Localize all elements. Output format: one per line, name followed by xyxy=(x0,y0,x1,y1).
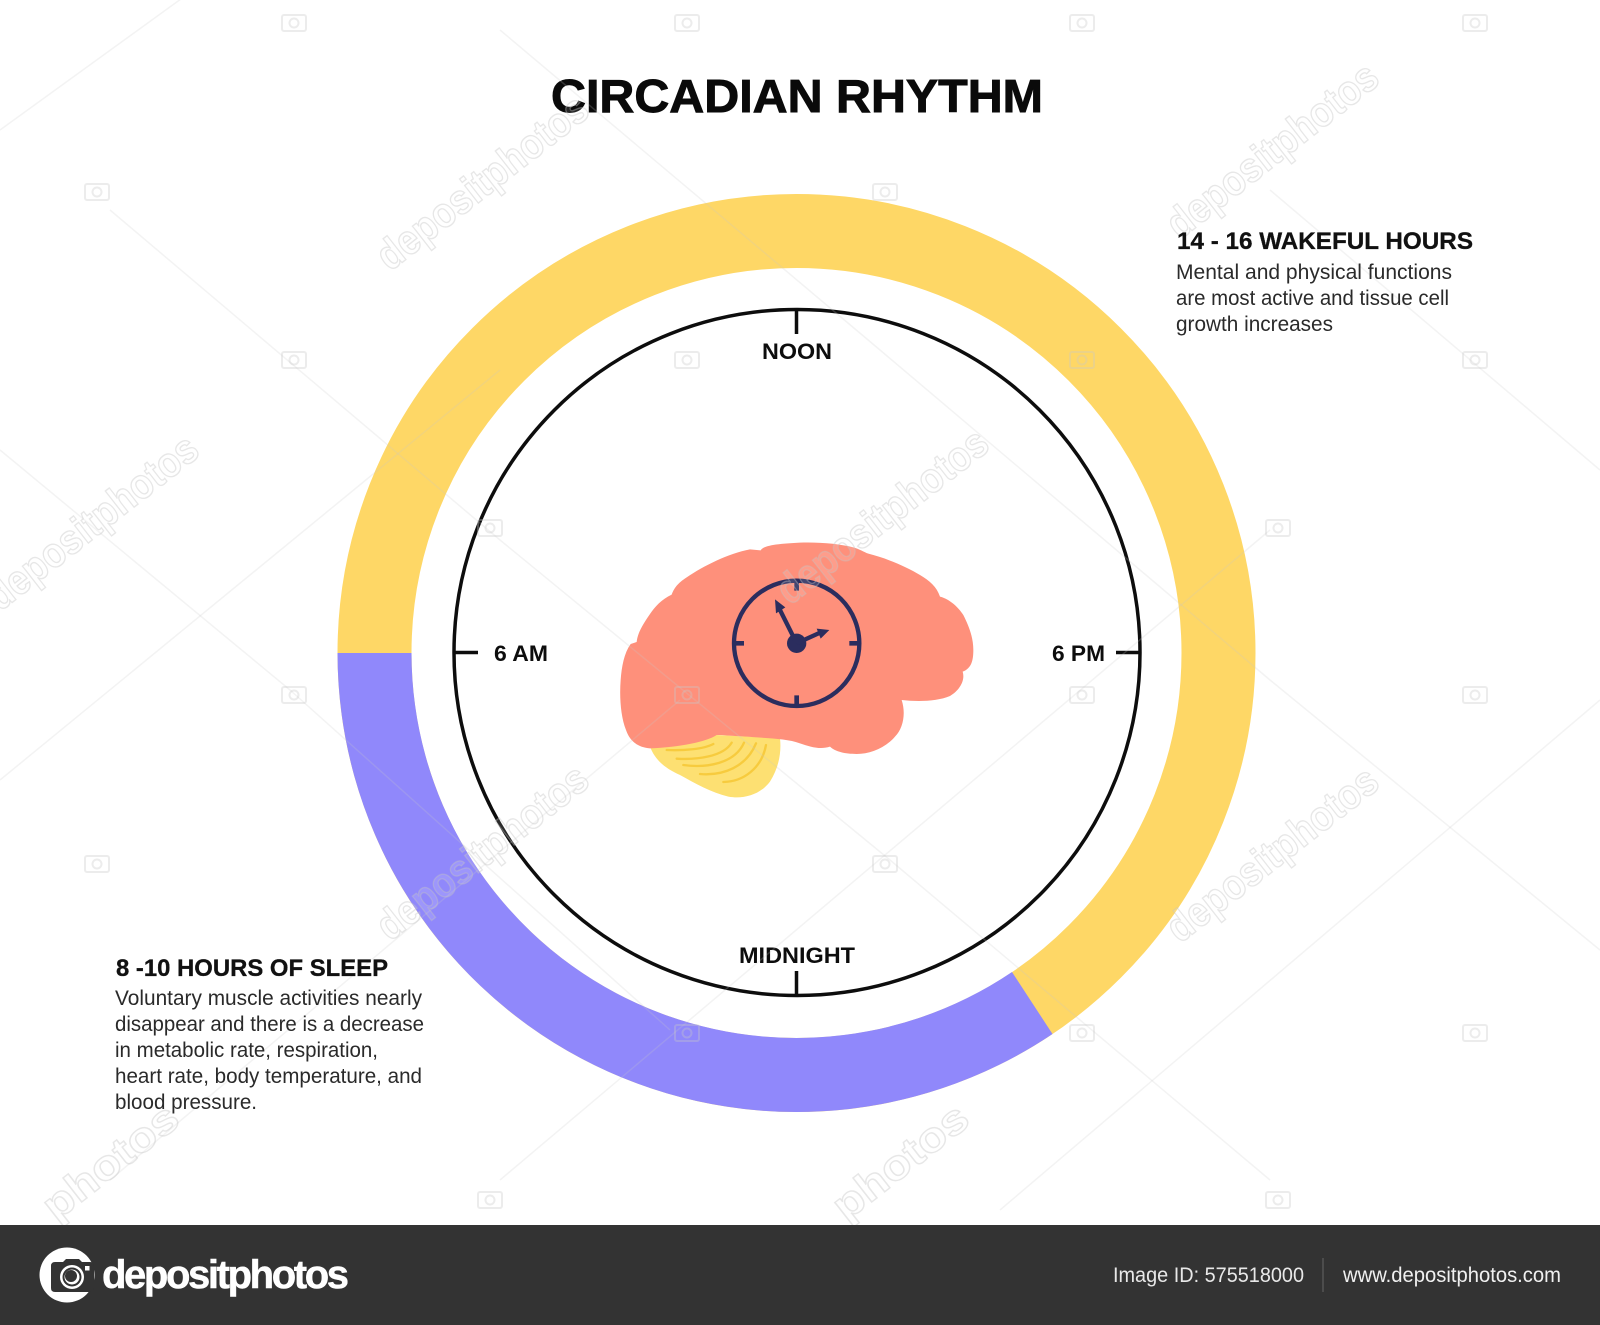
sleep hours arc xyxy=(337,653,1052,1112)
dial circle xyxy=(454,310,1140,996)
website url: www.depositphotos.com xyxy=(1342,1264,1561,1287)
image id: Image ID: 575518000 xyxy=(1113,1264,1304,1287)
footer divider xyxy=(1322,1258,1324,1292)
icon: camera logo xyxy=(40,1248,94,1302)
sleep body text: blood pressure. xyxy=(115,1090,257,1114)
label: noon: NOON xyxy=(762,339,832,364)
sleep body text: disappear and there is a decrease xyxy=(115,1012,424,1036)
wakeful body text: are most active and tissue cell xyxy=(1176,286,1449,310)
callout: hours of sleep xyxy=(115,955,424,1114)
footer bar xyxy=(0,1225,1600,1325)
watermark layer: depositphotos xyxy=(1157,52,1387,247)
wakeful body text xyxy=(1176,260,1452,336)
label: 6 am: 6 AM xyxy=(494,641,548,666)
title: CIRCADIAN RHYTHM xyxy=(551,70,1043,122)
sleep body text: in metabolic rate, respiration, xyxy=(115,1038,378,1062)
watermark layer: depositphotos xyxy=(767,418,997,613)
cerebrum xyxy=(620,543,973,754)
sleep heading: 8 -10 HOURS OF SLEEP xyxy=(116,955,388,982)
sleep body text xyxy=(115,986,424,1114)
clock dial xyxy=(454,308,1140,997)
watermark layer: depositphotos xyxy=(367,754,597,949)
callout: wakeful hours xyxy=(1176,228,1473,336)
sleep body text: Voluntary muscle activities nearly xyxy=(115,986,422,1010)
watermark layer: photos xyxy=(823,1094,978,1229)
watermark layer: depositphotos xyxy=(367,84,597,279)
sleep body text: heart rate, body temperature, and xyxy=(115,1064,422,1088)
label: 6 pm: 6 PM xyxy=(1052,641,1105,666)
watermark layer: photos xyxy=(33,1094,188,1229)
watermark layer: depositphotos xyxy=(1157,756,1387,951)
outer day-night ring xyxy=(337,231,1218,1112)
wakeful heading: 14 - 16 WAKEFUL HOURS xyxy=(1177,228,1473,255)
wakeful body text: Mental and physical functions xyxy=(1176,260,1452,284)
label: midnight: MIDNIGHT xyxy=(739,943,856,968)
logo wordmark: depositphotos xyxy=(102,1253,349,1297)
cerebellum xyxy=(650,735,780,797)
dial ticks xyxy=(454,308,1140,997)
brain illustration xyxy=(620,543,973,797)
clock icon xyxy=(734,581,859,706)
wakeful hours arc xyxy=(374,231,1218,1075)
wakeful body text: growth increases xyxy=(1176,312,1333,336)
